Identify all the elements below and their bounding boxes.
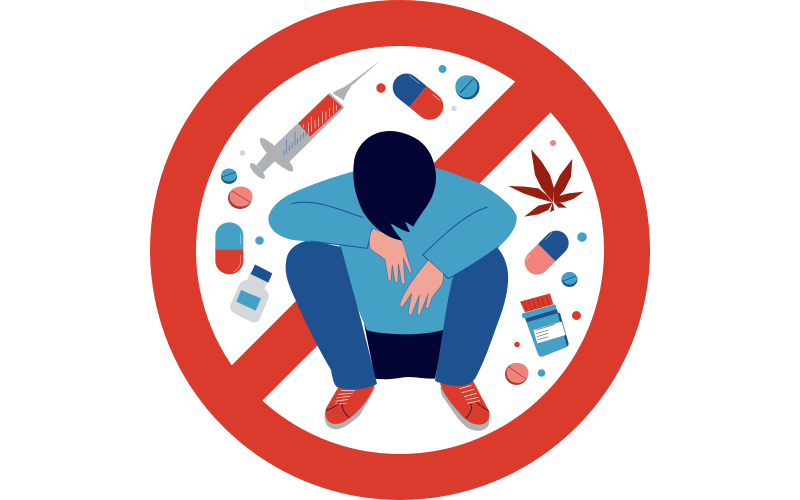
icon: cannabis leaf [508, 149, 584, 217]
sleeve fold lines [292, 202, 499, 279]
torso [338, 225, 457, 334]
icon: pink dot top right [550, 140, 556, 146]
left shoe [325, 383, 376, 429]
dark undergarment [363, 320, 447, 379]
hair [353, 131, 436, 241]
icon: blue and red capsule [387, 68, 449, 125]
icon: small red dot lower [514, 342, 520, 347]
prohibition diagonal bar [200, 57, 580, 423]
left leg [286, 240, 377, 389]
icon: small blue dot [438, 65, 446, 73]
icon: pink round pill lower [505, 363, 528, 385]
right leg [435, 245, 508, 386]
icon: blue and red capsule left [215, 222, 243, 274]
icon: blue round pill left [221, 168, 237, 184]
icon: red dot right [572, 311, 581, 320]
right hand [400, 260, 444, 315]
icon: small grey dot left [240, 150, 245, 156]
icon: blue round pill right [562, 272, 578, 287]
icon: blue dot right [577, 232, 587, 242]
icon: medicine bottle with red cap [520, 293, 569, 357]
icon: blue and pink capsule right [520, 226, 574, 280]
right shoe [440, 380, 490, 431]
figure: sad person sitting [268, 131, 517, 431]
icon: pink round pill left [228, 186, 252, 209]
icon: small grey dot [451, 106, 457, 111]
left hand [369, 228, 412, 284]
prohibition ring [150, 0, 650, 500]
icon: syringe [250, 60, 381, 179]
icon: white medicine bottle [230, 264, 272, 322]
icon: blue dot lower [538, 369, 545, 377]
sweater arms and shoulders [268, 168, 517, 278]
icon: blue round pill top [455, 75, 480, 100]
icon: blue dot left [255, 236, 264, 245]
icon: small red dot [376, 83, 386, 93]
